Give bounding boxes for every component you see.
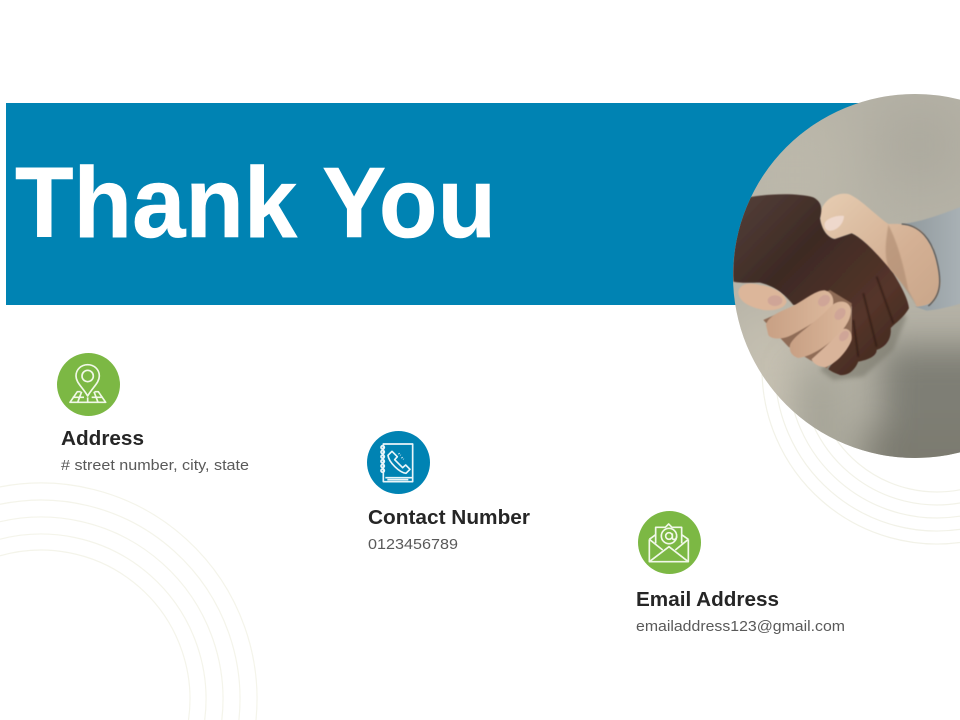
- decorative rings: bottom left: [0, 483, 257, 720]
- wrist shadow: [886, 226, 914, 300]
- photo: handshake: [733, 94, 960, 458]
- sleeve: [902, 207, 960, 311]
- title: Thank You: [15, 147, 496, 259]
- heading: contact number: Contact Number: [368, 506, 530, 529]
- heading: email address: Email Address: [636, 588, 779, 611]
- title banner: [6, 103, 886, 305]
- dark hand creases: [853, 277, 893, 357]
- thumb nail: [824, 216, 844, 231]
- text: phone number: 0123456789: [368, 537, 458, 553]
- hand shadow: [820, 314, 908, 382]
- cuff line: [902, 224, 940, 306]
- icon: phone book: [367, 431, 430, 494]
- decorative rings: bottom right: [762, 369, 960, 544]
- dark hand: [733, 194, 909, 375]
- text: email: emailaddress123@gmail.com: [636, 619, 845, 635]
- finger nails: [768, 295, 849, 341]
- heading: address: Address: [61, 427, 144, 450]
- icon: map pin: [57, 353, 120, 416]
- light hand: wrist and thumb: [820, 194, 940, 307]
- contact: address: [57, 353, 249, 474]
- contact: phone: [367, 431, 530, 553]
- fingers of light hand: [738, 284, 852, 368]
- icon: envelope: [638, 511, 701, 574]
- contact: email: [636, 511, 845, 635]
- text: street: # street number, city, state: [61, 458, 249, 474]
